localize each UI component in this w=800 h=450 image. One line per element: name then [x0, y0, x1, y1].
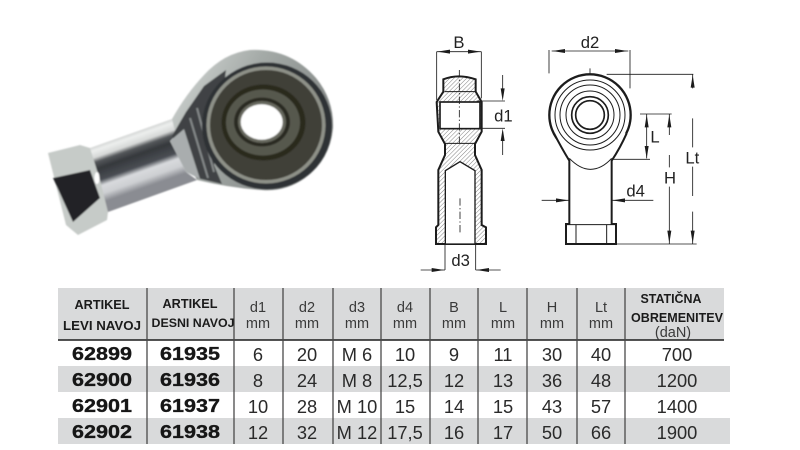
row 62900: 62900 [72, 369, 132, 390]
row 62901: 15 [395, 396, 415, 417]
specification table [58, 288, 730, 444]
front view [549, 74, 631, 244]
dimension labels: d4 [626, 182, 645, 201]
header labels: Lt [595, 300, 607, 316]
row 62901: 15 [493, 396, 513, 417]
row 62900: 24 [297, 370, 317, 391]
inner ring [234, 98, 290, 146]
seal [210, 70, 322, 180]
row 62899: 9 [449, 344, 459, 365]
ball [226, 90, 300, 156]
shank highlight [94, 172, 100, 184]
row 62899: 11 [494, 344, 512, 365]
row 62899: 40 [591, 344, 611, 365]
header labels: ARTIKEL [74, 297, 130, 312]
row 62902: 16 [444, 422, 464, 443]
row 62900: 8 [253, 370, 263, 391]
dimension labels: Lt [685, 148, 700, 167]
row 62900: 48 [591, 370, 611, 391]
row 62901: 62901 [72, 395, 132, 416]
photo: rod end bearing [48, 50, 333, 235]
header labels [63, 291, 723, 341]
row 62902: 66 [591, 422, 611, 443]
header labels: d3 [349, 300, 365, 316]
dimension labels: d2 [581, 33, 599, 52]
row 62899: M 6 [342, 344, 372, 365]
header labels: d4 [397, 300, 413, 316]
dimension labels [451, 33, 700, 270]
row 62899: 6 [253, 344, 263, 365]
header labels: d1 [250, 300, 266, 316]
row 62899: 10 [395, 344, 415, 365]
dimension arrows [432, 49, 695, 272]
row 62902: 61938 [160, 421, 220, 442]
row 62899: 700 [662, 344, 692, 365]
header labels: mm [442, 316, 466, 332]
row 62900: 13 [493, 370, 513, 391]
bearing seat [202, 62, 332, 190]
dimension labels: B [453, 33, 465, 52]
row 62902 [72, 421, 697, 443]
row 62902: 12 [248, 422, 268, 443]
centre lines [459, 68, 632, 233]
table header background [58, 288, 724, 340]
row 62901: M 10 [337, 396, 377, 417]
row 62899: 61935 [160, 343, 220, 364]
row 62899: 62899 [72, 343, 132, 364]
header labels: mm [491, 316, 515, 332]
header labels: DESNI NAVOJ [152, 316, 234, 330]
row 62900: 1200 [657, 370, 697, 391]
header labels: mm [246, 316, 270, 332]
header labels: mm [295, 316, 319, 332]
row 62900: 12,5 [387, 370, 423, 391]
hexagonal nut: dark face [53, 170, 100, 222]
row 62901 [72, 395, 697, 417]
table rules [58, 288, 724, 444]
dimension labels: d1 [494, 107, 513, 126]
shank [90, 119, 197, 212]
row 62900: 12 [444, 370, 464, 391]
row 62900: 61936 [160, 369, 220, 390]
row 62902: 17,5 [387, 422, 423, 443]
shoulder stripes [190, 108, 214, 178]
header labels: (daN) [655, 325, 691, 341]
row 62899 [72, 343, 692, 365]
header labels: d2 [299, 300, 315, 316]
header labels: OBREMENITEV [631, 310, 723, 325]
row 62902: 62902 [72, 421, 132, 442]
row 62899: 30 [542, 344, 562, 365]
hexagonal nut: outline body [48, 145, 108, 235]
row 62902: M 12 [337, 422, 377, 443]
row 62901: 10 [248, 396, 268, 417]
row 62900: M 8 [342, 370, 372, 391]
header labels: L [499, 300, 507, 316]
header labels: ARTIKEL [162, 296, 218, 311]
dark shoulder between shank and eye [172, 70, 226, 184]
header labels: H [547, 300, 557, 316]
row 62901: 57 [591, 396, 611, 417]
dimension labels: d3 [451, 251, 470, 270]
bore section [440, 102, 480, 129]
dimension labels: L [650, 128, 660, 147]
row 62900 [72, 369, 697, 391]
row 62899: 20 [297, 344, 317, 365]
row 62902: 17 [493, 422, 513, 443]
header labels: mm [393, 316, 417, 332]
header labels: B [449, 300, 459, 316]
technical drawing: dimensioned views [421, 33, 700, 272]
row 62902: 1900 [657, 422, 697, 443]
row 62900: 36 [542, 370, 562, 391]
ball groove [222, 84, 306, 160]
header labels: mm [345, 316, 369, 332]
header labels: mm [589, 316, 613, 332]
hole rim [238, 101, 286, 143]
row 62902: 50 [542, 422, 562, 443]
row 62901: 1400 [657, 396, 697, 417]
row 62901: 61937 [160, 395, 220, 416]
header labels: mm [540, 316, 564, 332]
row 62901: 28 [297, 396, 317, 417]
header labels: LEVI NAVOJ [63, 318, 141, 333]
row 62901: 43 [542, 396, 562, 417]
shoulder highlight [170, 129, 200, 179]
side section view [436, 76, 486, 244]
threaded cavity [445, 162, 475, 244]
row stripes [58, 366, 730, 444]
outer race [206, 66, 326, 184]
eye housing [165, 50, 333, 190]
bore [241, 104, 283, 140]
dimension lines [421, 50, 697, 270]
row 62902: 32 [297, 422, 317, 443]
header labels: STATIČNA [640, 291, 702, 306]
dimension labels: H [664, 168, 676, 187]
row 62901: 14 [444, 396, 464, 417]
